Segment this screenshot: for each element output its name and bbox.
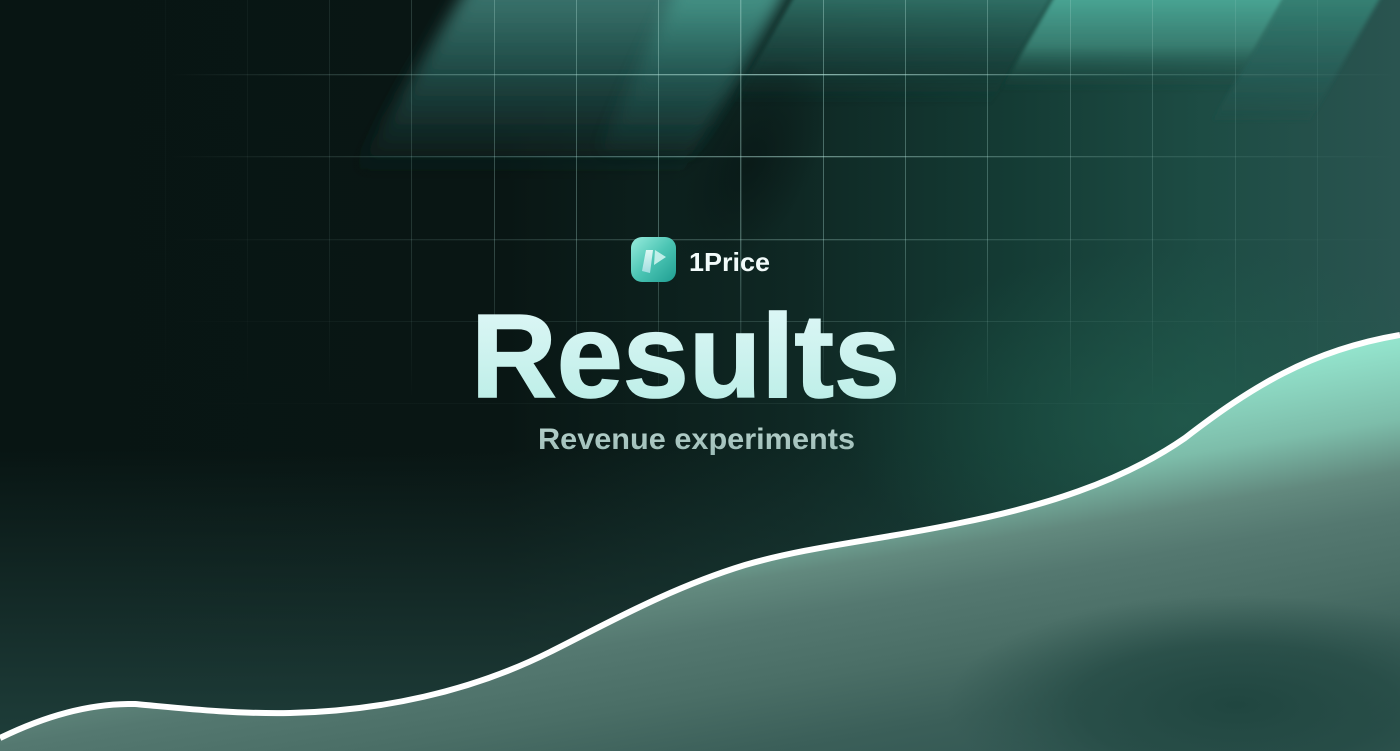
- grid lines: [165, 0, 1400, 404]
- icon: 1Price logo: [631, 237, 676, 282]
- brand name: 1Price: [689, 247, 770, 277]
- light beams: [352, 0, 1400, 296]
- subtitle: Revenue experiments: [538, 423, 855, 456]
- hill chart area: [0, 330, 1400, 751]
- title: Results: [471, 290, 900, 423]
- hill curve line: [0, 335, 1400, 738]
